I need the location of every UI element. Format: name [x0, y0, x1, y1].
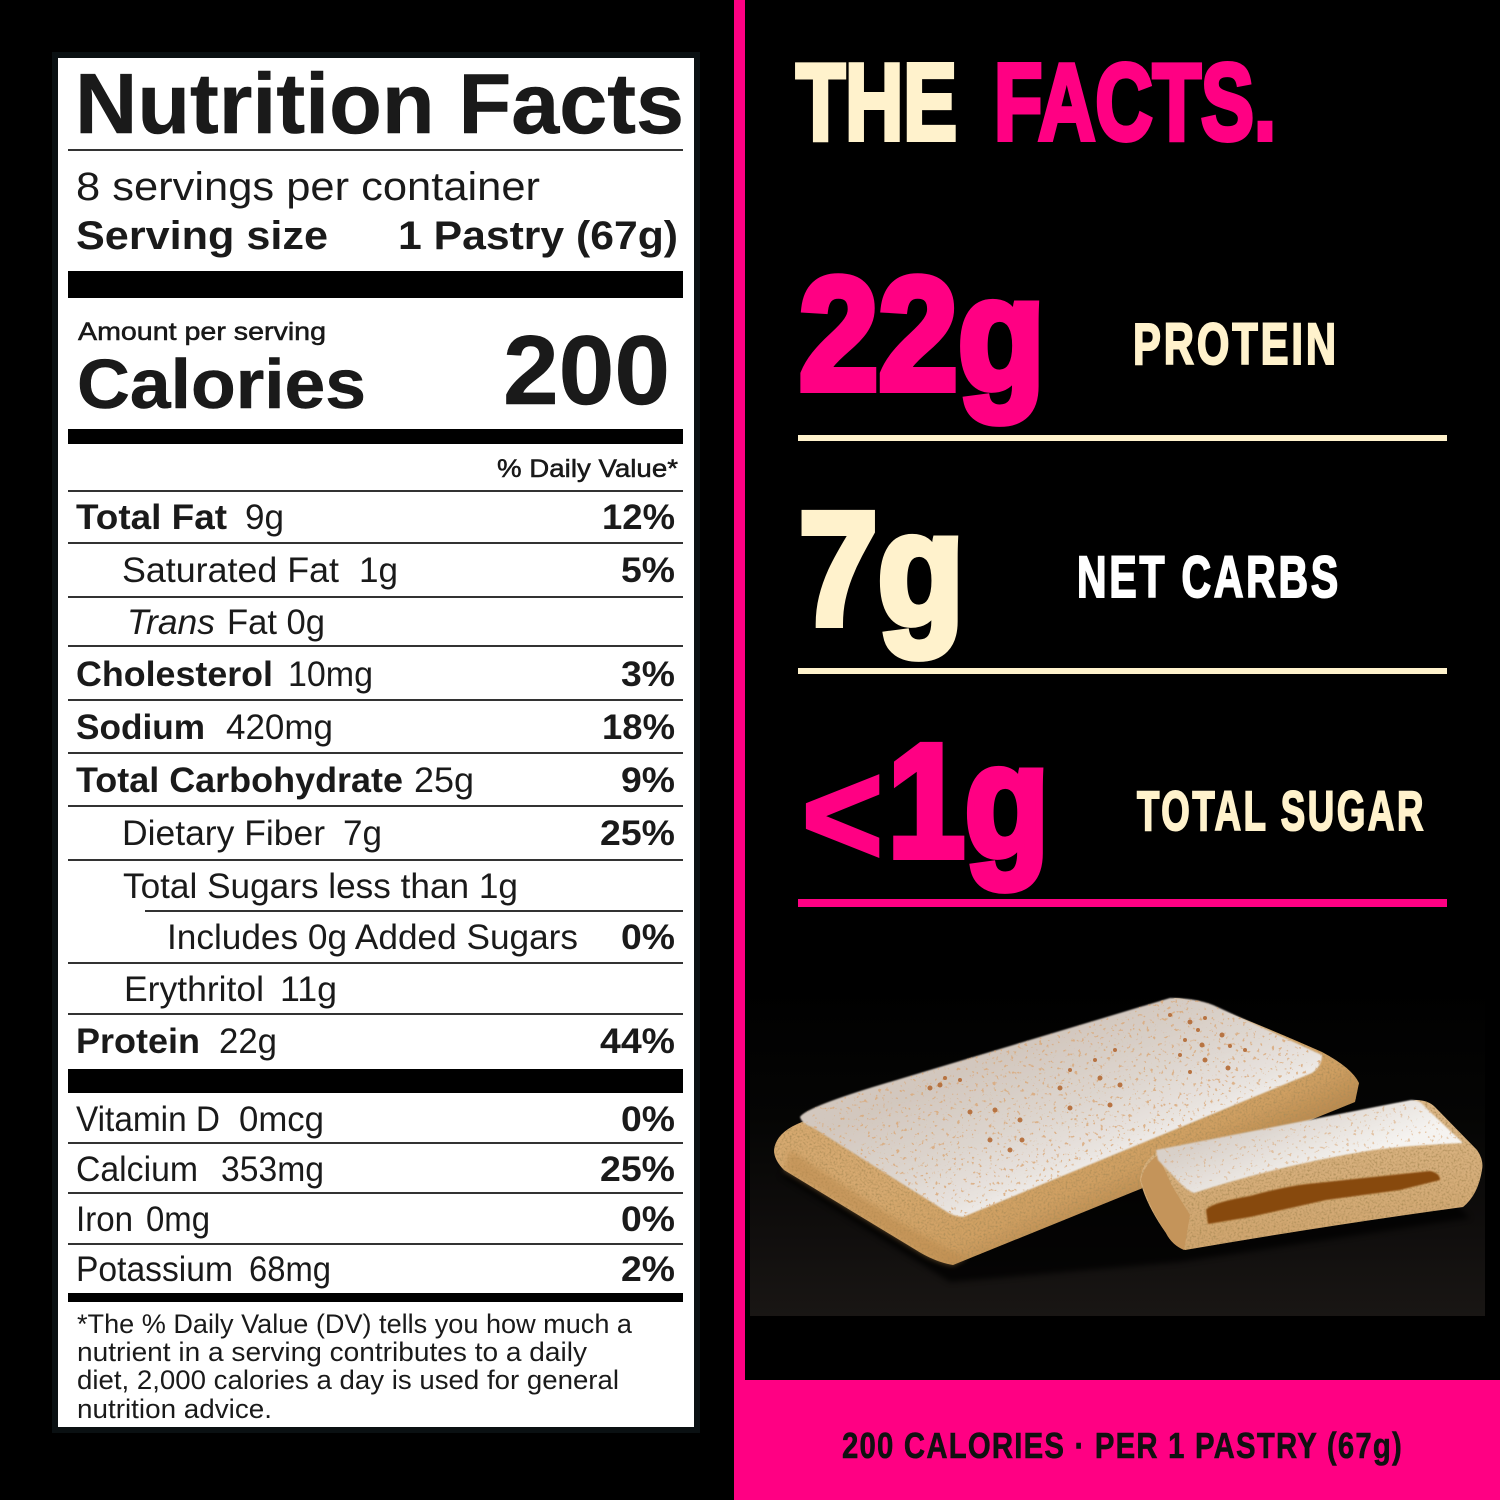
row: dietary fiber: 25%	[600, 814, 675, 853]
amount per serving: Amount per serving	[78, 318, 326, 346]
row: cholesterol: 3%	[621, 655, 675, 694]
stat: 22g protein: 22g	[799, 244, 1045, 423]
row: sodium: Sodium	[76, 708, 205, 747]
row: dietary fiber: 7g	[343, 814, 382, 853]
footer band	[734, 1380, 1500, 1500]
row: potassium: 68mg	[249, 1250, 331, 1289]
daily value header: % Daily Value*	[497, 455, 678, 483]
row: total sugars: Total Sugars less than 1g	[123, 867, 518, 906]
row: protein: 22g	[219, 1022, 277, 1061]
row: protein: Protein	[76, 1022, 200, 1061]
stat: 22g protein: PROTEIN	[1133, 312, 1339, 377]
row: vitamin d: 0mcg	[239, 1100, 324, 1139]
row: trans fat: Fat 0g	[227, 603, 325, 642]
cinnamon specks	[928, 1013, 1247, 1152]
stat: 7g net carbs: 7g	[799, 479, 964, 658]
pink vertical divider	[734, 0, 745, 1380]
row: total fat	[76, 498, 675, 537]
row: cholesterol: 10mg	[288, 655, 373, 694]
stat: less than 1g total sugar: <	[802, 733, 883, 895]
servings per container: 8 servings per container	[76, 165, 540, 209]
calories value: 200	[503, 315, 670, 425]
footnote: diet, 2,000 calories a day is used for general	[77, 1365, 619, 1395]
panel: nutrition facts label	[52, 52, 700, 1433]
icon: cut pastry half	[1140, 1100, 1482, 1250]
calories label: Calories	[77, 345, 366, 423]
row: saturated fat: 1g	[359, 551, 398, 590]
row: iron: 0mg	[146, 1200, 210, 1239]
icing	[800, 998, 1322, 1217]
row: erythritol: 11g	[280, 970, 337, 1009]
row: erythritol: Erythritol	[124, 970, 264, 1009]
stat: 7g net carbs	[798, 479, 1447, 674]
row: erythritol	[124, 970, 337, 1009]
cinnamon speckle	[800, 998, 1325, 1218]
row: total carbohydrate: Total Carbohydrate	[76, 761, 403, 800]
row: added sugars: 0%	[621, 918, 675, 957]
cut half side crust	[1141, 1155, 1190, 1250]
row: saturated fat: 5%	[621, 551, 675, 590]
row: protein	[76, 1022, 675, 1061]
row: added sugars: Includes 0g Added Sugars	[167, 918, 578, 957]
row: sodium: 420mg	[226, 708, 333, 747]
heading: The Facts	[796, 42, 1276, 164]
footnote	[77, 1309, 633, 1424]
row: protein: 44%	[600, 1022, 675, 1061]
heading: The Facts: FACTS.	[994, 42, 1276, 164]
row: total carbohydrate: 9%	[621, 761, 675, 800]
row: calcium: 25%	[600, 1150, 675, 1189]
stat: 7g net carbs: NET CARBS	[1077, 545, 1341, 610]
row: potassium: 2%	[621, 1250, 675, 1289]
stat: 22g protein	[798, 244, 1447, 441]
footnote: nutrition advice.	[77, 1394, 272, 1424]
row: iron: 0%	[621, 1200, 675, 1239]
serving size row: 1 Pastry (67g)	[398, 214, 678, 258]
row: potassium	[76, 1250, 675, 1289]
icon: whole pastry	[774, 998, 1359, 1265]
footnote: nutrient in a serving contributes to a daily	[77, 1337, 588, 1367]
row: dietary fiber	[122, 814, 675, 853]
row: total carbohydrate: 25g	[414, 761, 474, 800]
heading: The Facts: THE	[796, 42, 957, 164]
row: dietary fiber: Dietary Fiber	[122, 814, 325, 853]
row: total fat: 9g	[245, 498, 284, 537]
crust left face shading	[784, 1150, 966, 1265]
row: iron	[76, 1200, 675, 1239]
row: cholesterol	[76, 655, 675, 694]
cut half icing	[1156, 1100, 1463, 1193]
row: calcium: 353mg	[221, 1150, 324, 1189]
footnote: *The % Daily Value (DV) tells you how much a	[77, 1309, 633, 1339]
row: trans fat	[127, 603, 325, 642]
heading: Nutrition Facts: Nutrition Facts	[75, 57, 684, 152]
row: saturated fat	[122, 551, 675, 590]
row: trans fat: Trans	[127, 603, 215, 642]
row: total fat: 12%	[602, 498, 675, 537]
row: saturated fat: Saturated Fat	[122, 551, 339, 590]
row: vitamin d: 0%	[621, 1100, 675, 1139]
row: total fat: Total Fat	[76, 498, 227, 537]
product photo: pastry	[750, 985, 1485, 1316]
stat: less than 1g total sugar: 1g	[888, 711, 1049, 890]
row: sodium: 18%	[602, 708, 675, 747]
row: iron: Iron	[76, 1200, 133, 1239]
serving size row	[76, 214, 678, 258]
row: potassium: Potassium	[76, 1250, 233, 1289]
row: calcium: Calcium	[76, 1150, 198, 1189]
cut half speckle	[1156, 1100, 1466, 1194]
row: vitamin d: Vitamin D	[76, 1100, 220, 1139]
row: cholesterol: Cholesterol	[76, 655, 273, 694]
row: sodium	[76, 708, 675, 747]
serving size row: Serving size	[76, 214, 328, 258]
pastry shadow	[780, 1110, 1470, 1282]
row: calcium	[76, 1150, 675, 1189]
row: vitamin d	[76, 1100, 675, 1139]
stat: less than 1g total sugar	[798, 711, 1447, 907]
cut half filling	[1206, 1171, 1440, 1224]
row: total carbohydrate	[76, 761, 675, 800]
